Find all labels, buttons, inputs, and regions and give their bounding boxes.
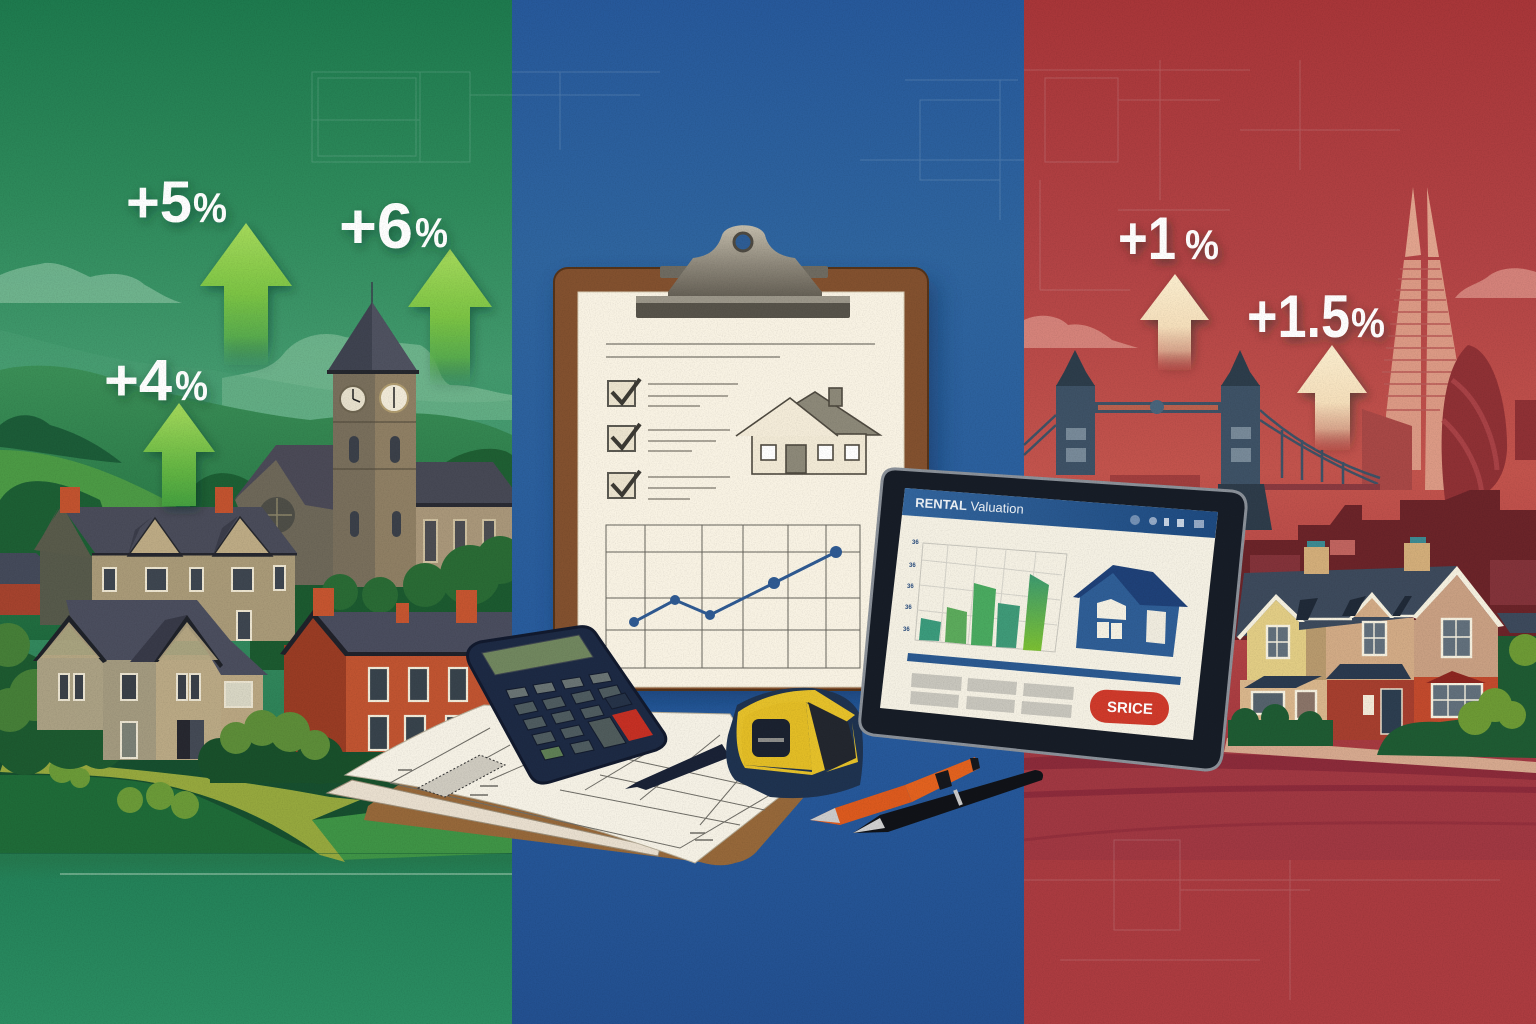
header title: RENTAL Valuation	[915, 495, 1024, 517]
arrow +6%	[408, 249, 492, 385]
label +4%	[104, 348, 208, 413]
label +6%: +6	[339, 190, 413, 262]
label +4%: +4	[104, 348, 172, 413]
price button	[1089, 689, 1170, 726]
label +1%: %	[1185, 221, 1219, 268]
bar chart	[903, 540, 1067, 652]
clip	[636, 225, 850, 318]
table cells	[910, 673, 1074, 718]
trees left of houses	[0, 623, 124, 775]
skyline: Shard	[1362, 187, 1460, 490]
brick house	[280, 588, 512, 752]
label +6%: %	[415, 209, 448, 256]
sketch house	[736, 388, 880, 474]
foreground meadow	[0, 745, 512, 874]
bar chart: 36	[903, 627, 910, 633]
folder and papers	[327, 705, 804, 865]
tablet	[860, 469, 1246, 770]
pencil	[625, 744, 730, 790]
label +5%	[126, 170, 227, 235]
label +1%: +1	[1118, 205, 1176, 272]
panel: blue tools	[512, 0, 1024, 1024]
clouds	[1024, 268, 1536, 348]
city silhouette	[1110, 475, 1536, 640]
tape measure	[726, 688, 863, 798]
hills and clouds	[0, 263, 512, 640]
label +5%: %	[193, 184, 227, 231]
panel: green countryside	[0, 0, 525, 1024]
progress bar	[907, 653, 1181, 685]
skyline: Gherkin	[1442, 345, 1536, 500]
hedge front	[198, 710, 470, 790]
label +1.5%: +1.5	[1247, 283, 1350, 350]
screen header	[902, 488, 1218, 538]
blueprint lines	[312, 60, 1500, 1000]
screen	[880, 488, 1218, 740]
label +1.5%: %	[1351, 299, 1385, 346]
bar chart: 36	[905, 605, 912, 611]
line chart	[606, 525, 860, 668]
label +5%: +5	[126, 170, 192, 235]
checklist	[608, 379, 738, 499]
Tower Bridge	[1024, 350, 1380, 530]
button label: SRICE	[1107, 699, 1153, 718]
label +1%	[1118, 205, 1219, 272]
hedge round church	[322, 536, 524, 613]
red small house left	[0, 545, 72, 615]
road	[1024, 738, 1536, 860]
hedges	[1228, 634, 1536, 758]
arrow +1.5%	[1297, 345, 1367, 450]
arrow +1%	[1140, 274, 1209, 370]
label +4%: %	[175, 362, 208, 409]
dark tree backdrop	[250, 518, 522, 670]
panel: red city	[1024, 0, 1536, 1024]
bar chart: 36	[912, 540, 919, 546]
church with clock tower	[232, 282, 525, 587]
arrow +4%	[143, 403, 215, 506]
bar chart: 36	[909, 563, 916, 569]
screen	[482, 635, 593, 675]
clipboard	[554, 225, 938, 700]
terrace houses: stone back	[34, 487, 297, 641]
header lines	[606, 344, 875, 357]
arrow +5%	[200, 223, 292, 365]
header icons	[1130, 515, 1204, 528]
pens	[810, 757, 1043, 833]
stone house front	[33, 600, 268, 760]
keypad	[506, 672, 632, 760]
calculator	[468, 627, 666, 783]
bar chart: 36	[907, 584, 914, 590]
terrace houses	[1236, 537, 1536, 740]
house icon	[1073, 565, 1188, 657]
label +6%	[339, 190, 448, 262]
